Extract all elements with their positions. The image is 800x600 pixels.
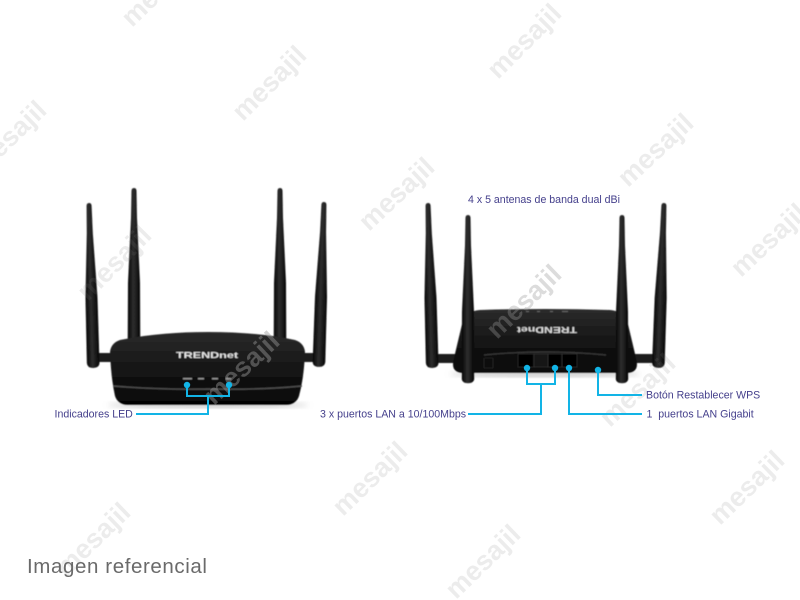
router: back view: [422, 203, 670, 383]
watermarks: mesajil: [49, 497, 136, 582]
watermarks: mesajil: [326, 436, 413, 521]
callout: WPS reset connector: [595, 367, 642, 395]
LAN ports: [518, 354, 577, 367]
watermarks: mesajil: [594, 348, 681, 432]
label: antennas: 4 x 5 antenas de banda dual dBi: [468, 194, 620, 206]
router body: back: [453, 309, 637, 373]
antenna: front right inner: [274, 188, 286, 353]
label: 3 LAN ports: 3 x puertos LAN a 10/100Mbps: [320, 408, 466, 420]
status lights: [526, 311, 568, 312]
antenna: back right inner: [616, 215, 628, 383]
watermarks: mesajil: [198, 326, 285, 410]
antenna: back right outer: [632, 203, 670, 368]
callout: 3 LAN ports connector: [468, 365, 558, 414]
watermarks: mesajil: [703, 445, 790, 530]
watermarks: mesajil: [71, 220, 157, 306]
caption: reference image: Imagen referencial: [27, 555, 208, 578]
antenna: back left inner: [462, 215, 474, 383]
watermarks: mesajil: [612, 108, 699, 192]
watermarks: mesajil: [480, 259, 567, 344]
watermarks: mesajil: [353, 152, 440, 236]
LED indicators: [183, 378, 231, 379]
logo: TRENDnet mirrored: TRENDnet: [517, 325, 577, 335]
logo: TRENDnet: TRENDnet: [176, 350, 238, 360]
callout: gigabit port connector: [566, 365, 642, 414]
antenna: front left inner: [128, 188, 140, 353]
router: front view: [83, 188, 330, 408]
router body: front: [110, 332, 305, 405]
callout: LED indicators connector: [136, 382, 232, 414]
watermarks: mesajil: [226, 40, 312, 126]
power port: [484, 358, 493, 368]
watermarks: mesajil: [481, 0, 567, 84]
antenna: back left outer: [422, 203, 460, 368]
label: WPS reset button: Botón Restablecer WPS: [646, 390, 760, 402]
antenna: front left outer: [83, 203, 114, 368]
label: gigabit LAN port: 1 puertos LAN Gigabit: [646, 408, 754, 420]
label: LED indicators: Indicadores LED: [54, 408, 133, 420]
antenna: front right outer: [300, 202, 330, 367]
